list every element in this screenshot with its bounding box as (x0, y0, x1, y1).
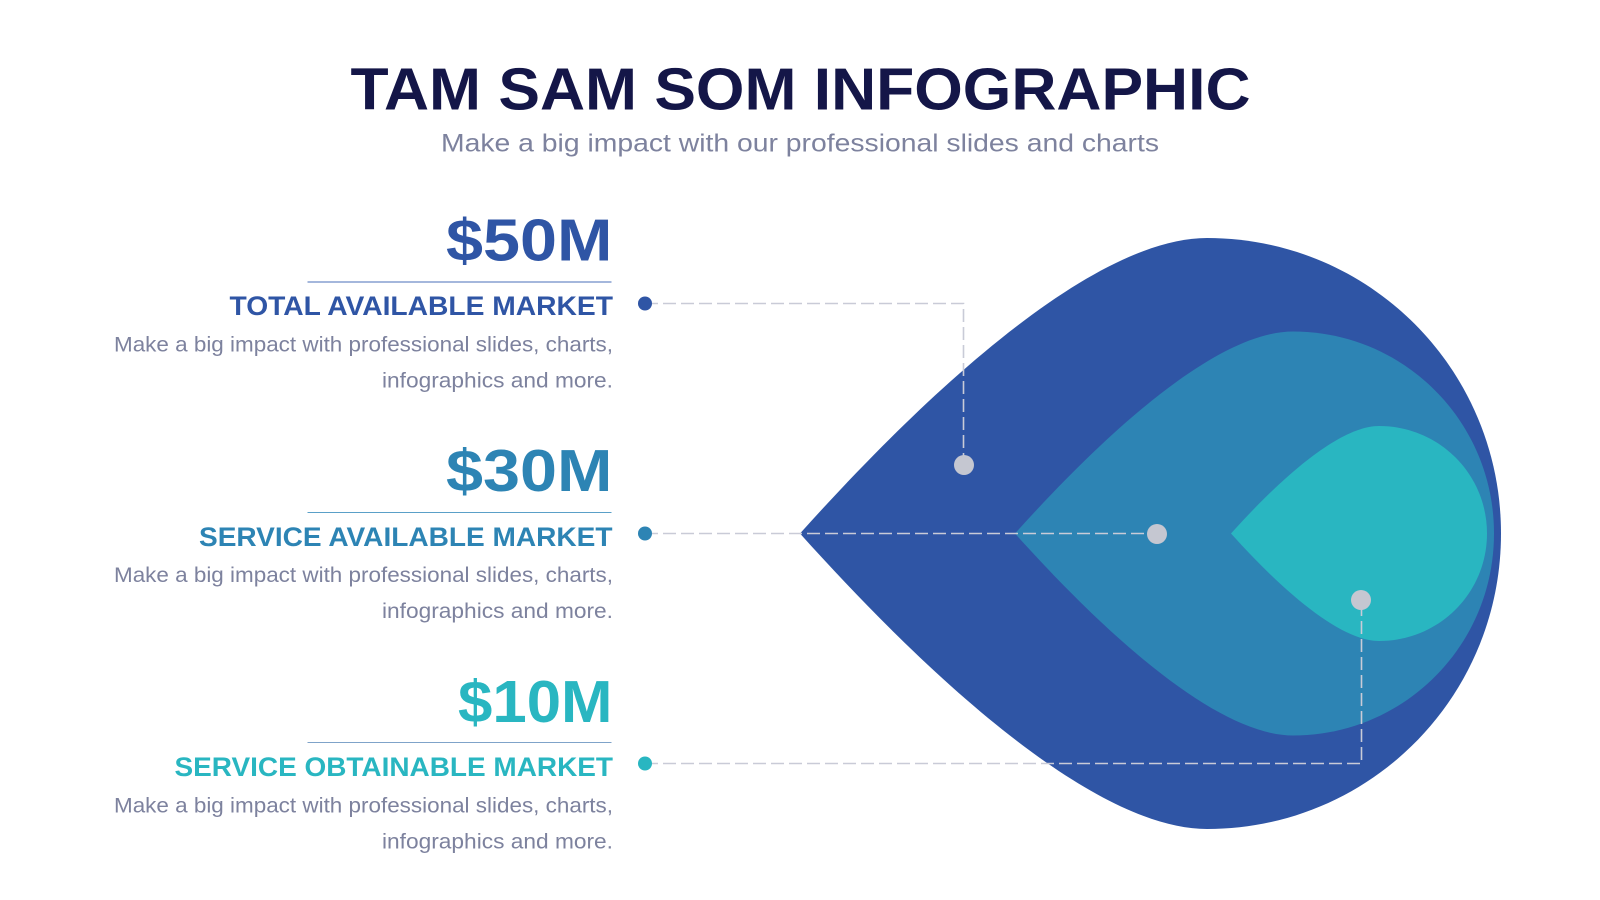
connector: service obtainable market (638, 590, 1371, 770)
value: $30M (446, 438, 612, 504)
value: $50M (446, 208, 612, 274)
text block: total available market (114, 208, 613, 392)
description: infographics and more. (382, 600, 613, 623)
connector: service available market (638, 524, 1167, 544)
label: SERVICE OBTAINABLE MARKET (174, 752, 613, 782)
connector: total available market (638, 296, 974, 475)
text block: service obtainable market (114, 669, 613, 854)
title: TAM SAM SOM INFOGRAPHIC (350, 56, 1250, 122)
description: Make a big impact with professional slides, charts, (114, 334, 613, 356)
text block: service available market (114, 438, 613, 623)
description: infographics and more. (382, 830, 613, 854)
label: SERVICE AVAILABLE MARKET (199, 522, 612, 552)
chart: nested teardrops (800, 238, 1501, 829)
label: TOTAL AVAILABLE MARKET (230, 291, 613, 321)
teardrop: service obtainable market (1231, 426, 1487, 641)
description: Make a big impact with professional slides, charts, (114, 794, 613, 818)
teardrop: total available market (800, 238, 1501, 829)
value: $10M (458, 669, 612, 735)
description: Make a big impact with professional slides, charts, (114, 564, 613, 587)
subtitle: Make a big impact with our professional slides and charts (441, 130, 1159, 158)
teardrop: service available market (1015, 332, 1494, 736)
description: infographics and more. (382, 370, 613, 392)
